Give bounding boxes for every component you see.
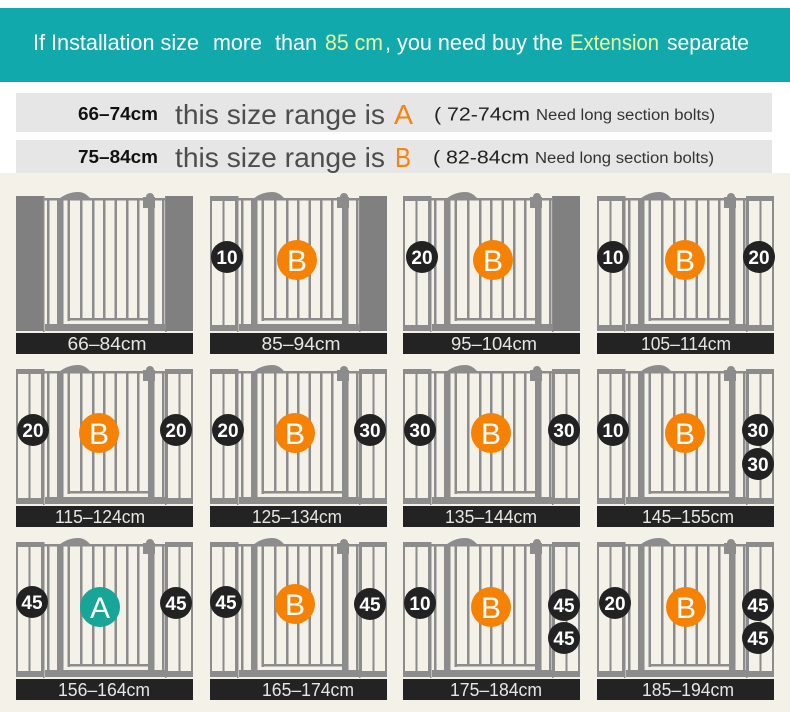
gate option: 115–124cm: 20 — [165, 421, 187, 442]
gate option: 145–155cm: B — [675, 418, 695, 451]
size range A row — [16, 93, 772, 132]
size range B row — [16, 140, 772, 173]
gate option: 175–184cm: 45 — [553, 629, 575, 650]
gate option: 175–184cm — [403, 538, 580, 700]
gate option: 125–134cm: 20 — [217, 421, 239, 442]
gate option: 105–114cm: 10 — [602, 248, 624, 269]
header banner — [0, 8, 790, 82]
gate option: 125–134cm: 30 — [359, 421, 381, 442]
cream background panel — [0, 173, 790, 712]
gate option: 95–104cm — [403, 192, 580, 354]
gate option: 156–164cm — [16, 538, 193, 700]
gate option: 66–84cm: 66–84cm — [68, 333, 146, 354]
gate option: 165–174cm: 165–174cm — [262, 679, 354, 700]
gate option: 95–104cm: 95–104cm — [451, 333, 537, 354]
header banner: separate — [667, 30, 749, 55]
gate option: 165–174cm: 45 — [359, 595, 381, 616]
size range B row: ( 82-84cm — [433, 146, 529, 168]
gate option: 165–174cm: 45 — [215, 593, 237, 614]
gate option: 175–184cm: 175–184cm — [450, 679, 542, 700]
gate option: 115–124cm: 115–124cm — [55, 506, 145, 527]
gate option: 185–194cm — [597, 538, 774, 700]
gate option: 165–174cm: B — [285, 589, 305, 622]
size range A row: Need long section bolts) — [536, 107, 715, 124]
gate option: 156–164cm: A — [90, 592, 110, 625]
header banner: , you need buy the — [385, 30, 563, 55]
gate option: 85–94cm: B — [287, 245, 307, 278]
gate option: 185–194cm: 45 — [747, 629, 769, 650]
gate option: 95–104cm: B — [483, 245, 503, 278]
gate option: 135–144cm: 135–144cm — [445, 506, 537, 527]
gate option: 125–134cm — [210, 365, 387, 527]
gate option: 115–124cm: 20 — [22, 421, 44, 442]
gate option: 185–194cm: B — [676, 592, 696, 625]
header banner: more — [213, 30, 262, 55]
gate option: 145–155cm: 30 — [747, 421, 769, 442]
gate option: 145–155cm: 145–155cm — [642, 506, 734, 527]
gate option: 145–155cm: 10 — [602, 421, 624, 442]
size range B row: Need long section bolts) — [535, 150, 714, 167]
size range B row: B — [395, 142, 411, 173]
gate option: 156–164cm: 45 — [165, 594, 187, 615]
gate option: 95–104cm: 20 — [411, 248, 433, 269]
gate option: 105–114cm: 105–114cm — [641, 333, 731, 354]
gate option: 125–134cm: 125–134cm — [252, 506, 342, 527]
gate option: 85–94cm: 85–94cm — [262, 333, 340, 354]
gate option: 135–144cm — [403, 365, 580, 527]
gate option: 175–184cm: 45 — [553, 596, 575, 617]
gate option: 165–174cm — [210, 538, 387, 700]
header banner: If Installation size — [33, 30, 199, 55]
gate option: 156–164cm: 45 — [21, 593, 43, 614]
size range A row: ( 72-74cm — [434, 104, 530, 124]
gate option: 185–194cm: 20 — [604, 594, 626, 615]
header banner: 85 cm — [325, 30, 383, 55]
header banner: than — [275, 30, 317, 55]
gate option: 135–144cm: 30 — [553, 421, 575, 442]
gate option: 105–114cm: 20 — [748, 248, 770, 269]
gate option: 66–84cm — [16, 192, 193, 354]
size range B row: this size range is — [175, 142, 385, 173]
size range A row: 66–74cm — [78, 103, 158, 124]
gate option: 85–94cm — [210, 192, 387, 354]
gate option: 135–144cm: 30 — [409, 421, 431, 442]
gate option: 175–184cm: B — [481, 592, 501, 625]
gate option: 145–155cm: 30 — [747, 455, 769, 476]
gate option: 125–134cm: B — [285, 418, 305, 451]
gate option: 85–94cm: 10 — [216, 248, 238, 269]
gate option: 185–194cm: 45 — [747, 596, 769, 617]
gate option: 105–114cm: B — [675, 245, 695, 278]
gate option: 156–164cm: 156–164cm — [58, 679, 150, 700]
gate option: 115–124cm: B — [89, 418, 109, 451]
gate option: 175–184cm: 10 — [409, 594, 431, 615]
gate option: 105–114cm — [597, 192, 775, 354]
gate option: 145–155cm — [597, 365, 774, 527]
size range B row: 75–84cm — [78, 146, 158, 167]
size range A row: A — [394, 99, 413, 130]
size range A row: this size range is — [175, 99, 385, 130]
header banner: Extension — [570, 30, 659, 55]
gate option: 135–144cm: B — [481, 418, 501, 451]
gate option: 185–194cm: 185–194cm — [642, 679, 734, 700]
gate option: 115–124cm — [16, 365, 193, 527]
